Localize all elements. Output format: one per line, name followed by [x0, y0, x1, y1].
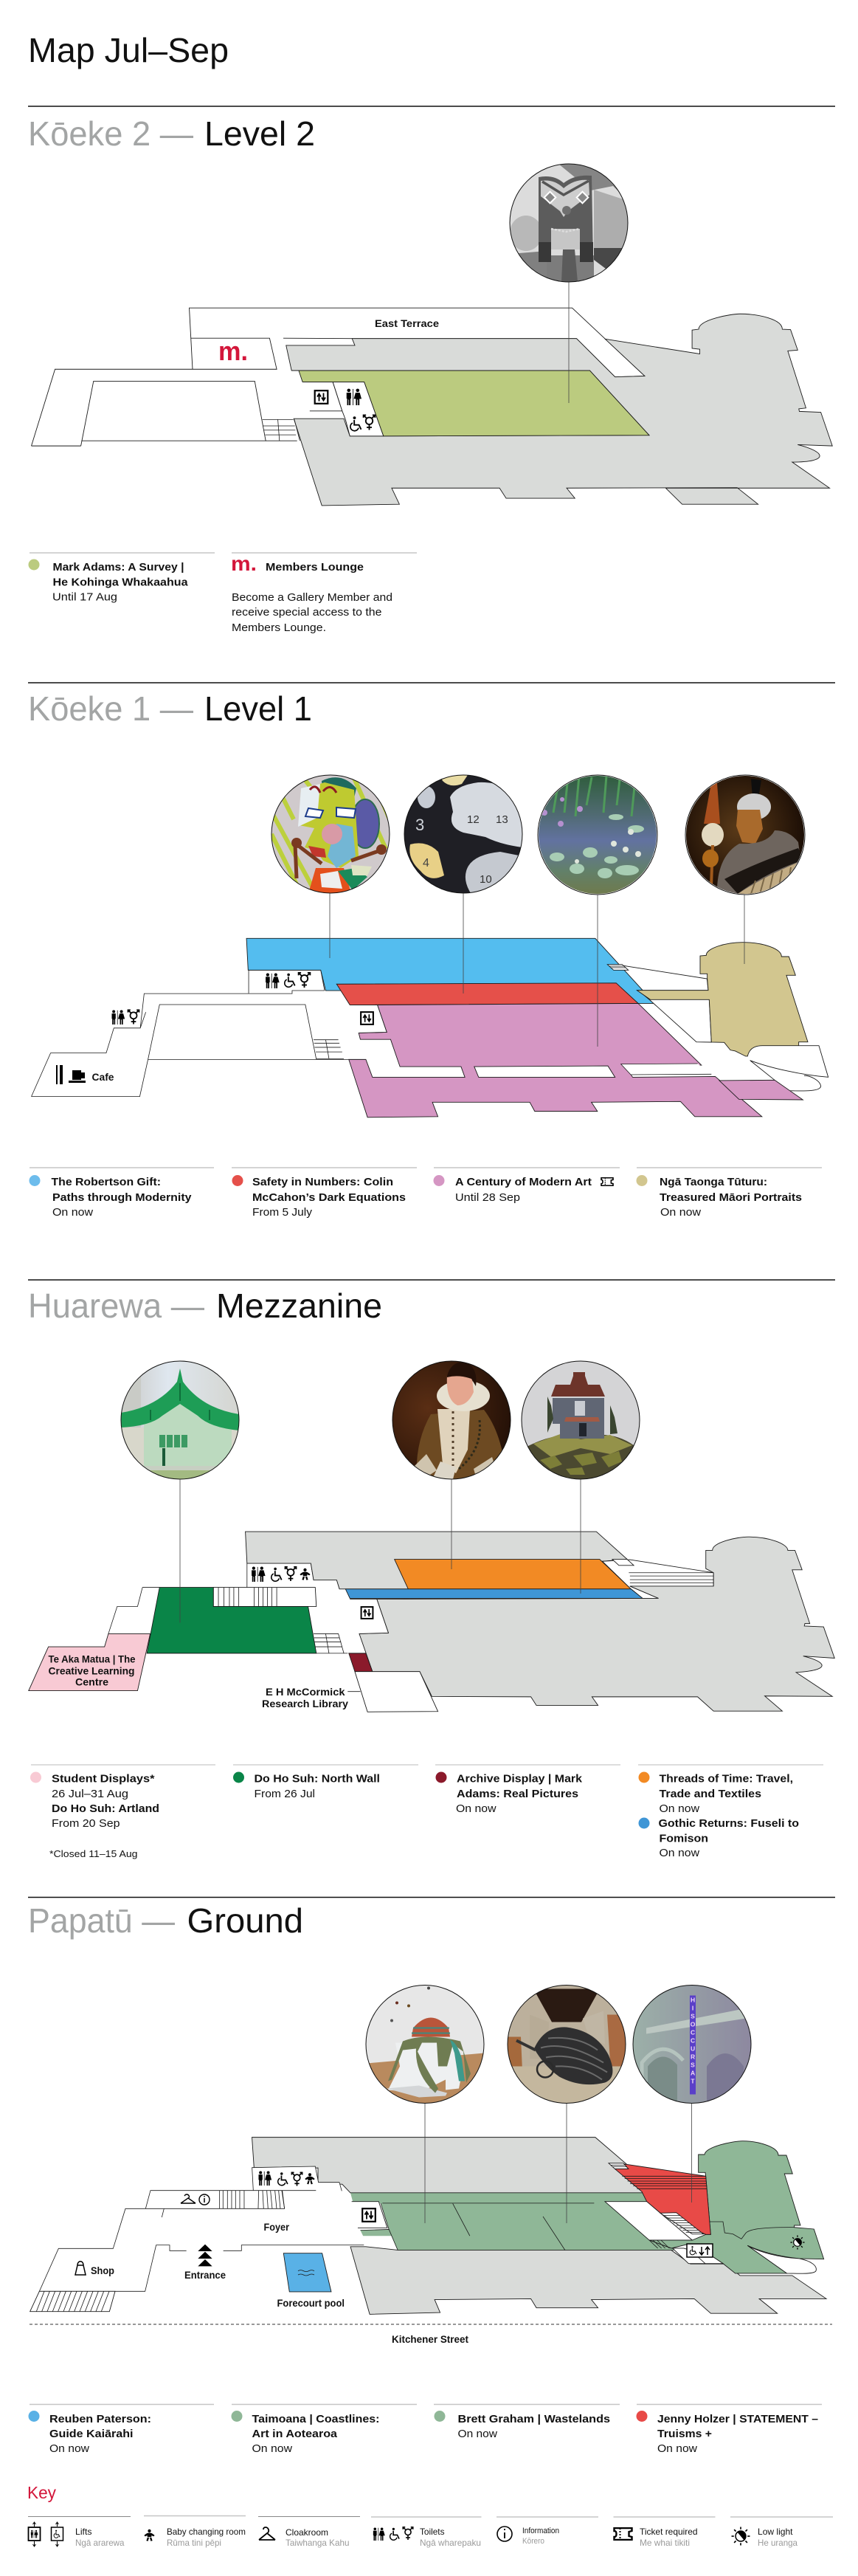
- label: Te Aka Matua: Creative Learning: [49, 1665, 134, 1677]
- legend: Archive Display: [435, 1765, 620, 1815]
- icon: fork and knife: [56, 1065, 63, 1084]
- panel: key: [27, 2483, 833, 2548]
- legend: Archive Display: Adams: Real Pictures: [457, 1788, 578, 1800]
- panel: level 1: [28, 683, 835, 1219]
- icon: toilets: [347, 389, 361, 405]
- legend: Mark Adams: [28, 553, 215, 604]
- icon: coffee cup: [69, 1070, 86, 1083]
- photo: model house on hill: [522, 1361, 640, 1479]
- legend: Brett Graham: [434, 2405, 620, 2440]
- label: E H McCormick Research Library: Research Library: [262, 1698, 349, 1709]
- legend: Jenny Holzer: Truisms +: [657, 2428, 712, 2440]
- label: Forecourt pool: Forecourt pool: [277, 2298, 345, 2309]
- legend: Taimoana Coastlines: On now: [252, 2442, 292, 2455]
- legend: Reuben Paterson: Guide Kaiārahi: [49, 2428, 133, 2440]
- photo: Jenny Holzer installation: S: [691, 2061, 695, 2068]
- icon: lift: [361, 1607, 373, 1619]
- key: toilets: [371, 2517, 481, 2548]
- key: toilets: Ngā wharepaku: [420, 2538, 481, 2548]
- key: baby changing room: Baby changing room: [167, 2527, 246, 2537]
- dotted line: street edge: [30, 2324, 832, 2325]
- photo: Do Ho Suh house: [121, 1361, 239, 1479]
- icon: lift: [361, 1012, 373, 1024]
- floor plan: mezzanine: [29, 1532, 834, 1712]
- photo: Jenny Holzer installation: [633, 1986, 751, 2104]
- photo: Jenny Holzer installation: T: [691, 2077, 695, 2084]
- key: lifts: [28, 2517, 131, 2548]
- legend: Jenny Holzer: On now: [657, 2442, 697, 2455]
- key: ticket required: [614, 2517, 716, 2548]
- label: E H McCormick Research Library: E H McCormick: [266, 1687, 345, 1698]
- key: ticket required: Me whai tikiti: [640, 2538, 690, 2548]
- legend: Jenny Holzer: [636, 2405, 822, 2455]
- photo: McCahon numbers: 4: [423, 857, 429, 869]
- key: ticket required: Ticket required: [640, 2527, 698, 2537]
- heading: level 1: Level 1: [204, 689, 312, 728]
- legend: Safety in Numbers: [232, 1168, 417, 1219]
- photo: Picasso portrait: [271, 775, 390, 893]
- label: E H McCormick Research Library: [262, 1687, 349, 1709]
- heading: mezzanine: Mezzanine: [216, 1287, 382, 1325]
- legend: Threads of Time and Gothic Returns: On now: [660, 1847, 699, 1859]
- photo: Jenny Holzer installation: C: [691, 2037, 695, 2045]
- legend: Safety in Numbers: Safety in Numbers: Colin: [252, 1176, 393, 1188]
- legend: Do Ho Suh North Wall: [233, 1765, 418, 1800]
- legend: Safety in Numbers: McCahon’s Dark Equations: [252, 1191, 406, 1204]
- panel: mezzanine: [28, 1280, 835, 1859]
- key: information: Information: [522, 2527, 559, 2535]
- legend: Student Displays: Student Displays*: [52, 1773, 155, 1785]
- icons: toilets level 1: [266, 973, 310, 988]
- icon: accessible toilets: [350, 415, 375, 431]
- legend: A Century of Modern Art: [434, 1168, 620, 1204]
- photo: Jenny Holzer installation: U: [691, 2045, 695, 2052]
- photo: Jenny Holzer installation: C: [691, 2028, 695, 2036]
- key: baby changing room: [144, 2515, 246, 2548]
- legend: Mark Adams: He Kohinga Whakaahua: [53, 576, 188, 589]
- heading: level 2: Level 2: [204, 114, 315, 153]
- legend: Members Lounge: Become a Gallery Member and: [232, 591, 392, 604]
- legend: The Robertson Gift: [30, 1168, 214, 1219]
- photo: Monet water lilies: [538, 775, 657, 895]
- icon: members lounge: m.: [218, 336, 248, 366]
- legend: The Robertson Gift: The Robertson Gift:: [52, 1176, 161, 1188]
- photo: portrait of a woman: [392, 1361, 511, 1479]
- floor plan: level 2: [32, 308, 832, 506]
- photo: carved gateway: [510, 164, 628, 282]
- key: information: Kōrero: [522, 2537, 544, 2546]
- legend: A Century of Modern Art: Until 28 Sep: [455, 1191, 520, 1204]
- leader lines: [425, 2104, 692, 2223]
- legend: Threads of Time and Gothic Returns: [638, 1765, 823, 1859]
- key: toilets: Toilets: [420, 2527, 444, 2537]
- photo: McCahon numbers: [404, 775, 522, 893]
- photo: Jenny Holzer installation: O: [691, 2021, 696, 2028]
- photo: McCahon numbers: 10: [480, 873, 492, 886]
- icons: toilets ground: [258, 2172, 315, 2186]
- legend: Ngā Taonga Tūturu: Ngā Taonga Tūturu:: [660, 1176, 767, 1188]
- key: low light: He uranga: [758, 2538, 798, 2548]
- label: Te Aka Matua: [49, 1653, 136, 1687]
- key: low light: [730, 2517, 833, 2548]
- legend: Student Displays: From 20 Sep: [52, 1817, 120, 1830]
- legend: Threads of Time and Gothic Returns: Gothic Returns: Fuseli to: [658, 1817, 799, 1830]
- label: Foyer: Foyer: [264, 2222, 290, 2233]
- photo: Goldie portrait: [685, 775, 806, 895]
- icon: accessible lift: [687, 2244, 713, 2257]
- legend: Mark Adams: Until 17 Aug: [52, 590, 117, 604]
- heading: mezzanine: Huarewa —: [28, 1287, 204, 1325]
- heading: level 1: Kōeke 1 —: [28, 689, 193, 728]
- label: Te Aka Matua: Centre: [75, 1677, 109, 1687]
- legend: Student Displays: 26 Jul–31 Aug: [52, 1788, 128, 1800]
- legend: Brett Graham: Brett Graham | Wastelands: [457, 2413, 610, 2425]
- icons: toilets mezzanine: [252, 1567, 311, 1582]
- key: information: [497, 2517, 598, 2546]
- heading: ground: Papatū —: [28, 1901, 175, 1940]
- leader lines: [180, 1479, 581, 1622]
- key: lifts: Ngā ararewa: [75, 2538, 125, 2548]
- floor plan: ground: [30, 2138, 832, 2345]
- key: cloakroom: Taiwhanga Kahu: [286, 2538, 350, 2548]
- legend: Archive Display: On now: [456, 1802, 497, 1815]
- legend: Reuben Paterson: Reuben Paterson:: [49, 2413, 151, 2425]
- legend: Archive Display: Archive Display | Mark: [457, 1773, 583, 1785]
- title: Map Jul–Sep: [28, 31, 229, 69]
- heading: level 2: Kōeke 2 —: [28, 114, 193, 153]
- legend: Ngā Taonga Tūturu: [636, 1168, 822, 1219]
- icon: lift: [315, 390, 328, 404]
- legend: The Robertson Gift: On now: [52, 1206, 93, 1219]
- label: Entrance: Entrance: [184, 2270, 226, 2281]
- legend: Members Lounge: m.: [231, 552, 257, 575]
- legend: Threads of Time and Gothic Returns: On now: [660, 1802, 699, 1815]
- photo: McCahon numbers: 12: [467, 813, 480, 826]
- heading: mezzanine: [28, 1287, 382, 1325]
- icons: cloakroom and information: [181, 2194, 210, 2205]
- key: low light: Low light: [758, 2527, 793, 2537]
- legend: Do Ho Suh North Wall: Do Ho Suh: North Wall: [254, 1773, 380, 1785]
- legend: Brett Graham: On now: [457, 2428, 497, 2440]
- legend: Members Lounge: [231, 552, 417, 634]
- photo: Jenny Holzer installation: S: [691, 2012, 695, 2019]
- legend: Members Lounge: receive special access to the: [232, 606, 382, 619]
- legend: Ngā Taonga Tūturu: On now: [660, 1206, 701, 1219]
- legend: Taimoana Coastlines: Art in Aotearoa: [252, 2428, 338, 2440]
- photo: Brett Graham sculpture: [508, 1986, 626, 2104]
- heading: ground: [28, 1901, 303, 1940]
- label: Te Aka Matua: Te Aka Matua | The: [49, 1653, 136, 1665]
- key: baby changing room: Rūma tini pēpi: [167, 2538, 221, 2548]
- label: Cafe: Cafe: [91, 1072, 114, 1083]
- key: cloakroom: Cloakroom: [286, 2527, 328, 2538]
- legend: Threads of Time and Gothic Returns: Fomison: [660, 1832, 708, 1845]
- legend: Student Displays: *Closed 11–15 Aug: [49, 1849, 138, 1859]
- floor plan: level 1: [32, 938, 828, 1117]
- label: Shop: [75, 2262, 114, 2276]
- panel: level 2: [28, 106, 835, 634]
- icons: toilets cafe wing: [112, 1010, 139, 1024]
- legend: Members Lounge: Members Lounge: [266, 561, 364, 574]
- legend: Reuben Paterson: On now: [49, 2442, 89, 2455]
- panel: ground: [28, 1897, 835, 2455]
- legend: A Century of Modern Art: A Century of Modern Art: [455, 1176, 592, 1188]
- label: East Terrace: East Terrace: [375, 318, 440, 329]
- legend: Student Displays: Do Ho Suh: Artland: [52, 1802, 159, 1815]
- icon: low light: [790, 2235, 805, 2250]
- label: Shop: Shop: [91, 2265, 114, 2276]
- photo: Jenny Holzer installation: R: [691, 2053, 695, 2061]
- legend: Safety in Numbers: From 5 July: [252, 1206, 313, 1219]
- heading: key: Key: [27, 2483, 56, 2502]
- heading: ground: Ground: [187, 1901, 303, 1940]
- legend: Jenny Holzer: Jenny Holzer | STATEMENT –: [657, 2413, 818, 2425]
- legend: The Robertson Gift: Paths through Modernity: [52, 1191, 192, 1204]
- heading: level 1: [28, 689, 312, 728]
- legend: Taimoana Coastlines: [232, 2405, 417, 2455]
- leader lines: [330, 893, 744, 1047]
- photo: Jenny Holzer installation: A: [691, 2070, 695, 2077]
- heading: level 2: [28, 114, 315, 153]
- legend: Reuben Paterson: [28, 2405, 214, 2455]
- label: Kitchener Street: Kitchener Street: [392, 2334, 468, 2345]
- leader line: [568, 282, 570, 403]
- legend: Members Lounge: Members Lounge.: [232, 621, 326, 634]
- photo: McCahon numbers: 3: [415, 816, 424, 834]
- photo: Reuben Paterson sculpture: [366, 1986, 484, 2104]
- photo: McCahon numbers: 13: [496, 813, 508, 826]
- legend: Ngā Taonga Tūturu: Treasured Māori Portraits: [660, 1191, 802, 1204]
- legend: Taimoana Coastlines: Taimoana | Coastlines:: [252, 2413, 379, 2425]
- legend: Threads of Time and Gothic Returns: Trade and Textiles: [660, 1788, 761, 1800]
- photo: Jenny Holzer installation: I: [692, 2005, 693, 2012]
- icon: lift: [362, 2208, 376, 2222]
- key: cloakroom: [258, 2517, 360, 2548]
- legend: Mark Adams: Mark Adams: A Survey |: [53, 561, 184, 574]
- key: lifts: Lifts: [75, 2527, 91, 2537]
- legend: Do Ho Suh North Wall: From 26 Jul: [254, 1788, 315, 1800]
- legend: Threads of Time and Gothic Returns: Threads of Time: Travel,: [660, 1773, 793, 1785]
- photo: Jenny Holzer installation: H: [691, 1996, 695, 2003]
- legend: Student Displays: [30, 1765, 215, 1859]
